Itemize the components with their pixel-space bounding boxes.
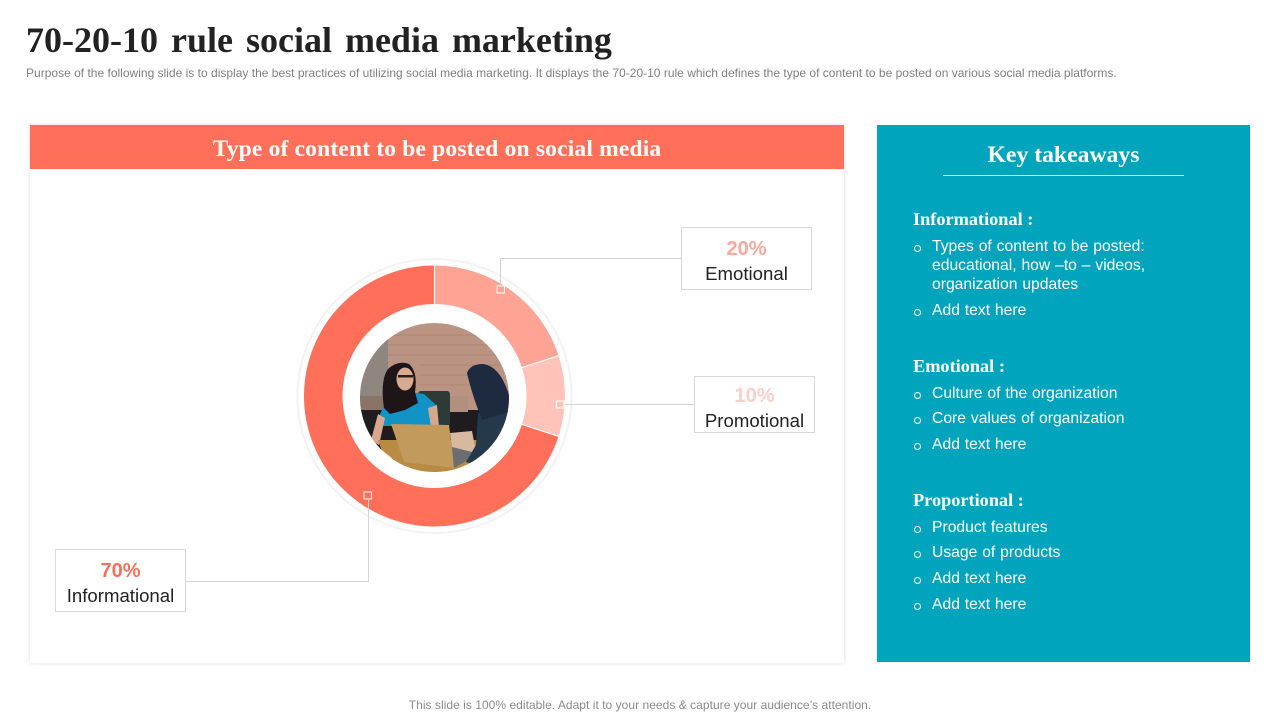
- informational bullet 1: [932, 238, 1145, 293]
- group: emotional: [913, 356, 1124, 453]
- emotional heading: Emotional :: [913, 356, 1005, 376]
- emotional value: 20%: [726, 238, 767, 260]
- connector: emotional: [497, 258, 682, 293]
- callout: emotional: [681, 227, 812, 290]
- segment: emotional 20%: [434, 266, 559, 368]
- title: 70-20-10 rule social media marketing: [26, 20, 612, 60]
- informational heading: Informational :: [913, 209, 1033, 229]
- proportional heading: Proportional :: [913, 490, 1024, 510]
- emotional label: Emotional: [705, 263, 788, 284]
- panel: content types: [30, 125, 844, 663]
- promotional value: 10%: [734, 385, 775, 407]
- group: proportional: [913, 490, 1060, 613]
- proportional bullet 2: Usage of products: [932, 544, 1060, 561]
- informational bullet 1: Types of content to be posted:: [932, 238, 1145, 255]
- panel: key takeaways: [877, 125, 1250, 662]
- callout: informational: [55, 549, 186, 612]
- outer ring: [298, 259, 572, 533]
- informational value: 70%: [100, 560, 141, 582]
- panel heading: [30, 125, 844, 169]
- footer note: This slide is 100% editable. Adapt it to your needs & capture your audience’s attention.: [409, 698, 871, 712]
- promotional label: Promotional: [705, 410, 804, 431]
- proportional bullet 3: Add text here: [932, 570, 1026, 587]
- group: informational: [913, 209, 1145, 319]
- proportional bullet 1: Product features: [932, 519, 1048, 536]
- informational bullet 1: educational, how –to – videos,: [932, 257, 1145, 274]
- connector: promotional: [556, 401, 694, 408]
- heading rule: [943, 175, 1184, 176]
- informational label: Informational: [67, 585, 174, 606]
- donut chart with connectors: [186, 258, 694, 582]
- proportional bullet 4: Add text here: [932, 596, 1026, 613]
- emotional bullet 2: Core values of organization: [932, 410, 1124, 427]
- segment dividers: [434, 265, 559, 436]
- callout: promotional: [694, 376, 815, 433]
- informational bullet 2: Add text here: [932, 302, 1026, 319]
- takeaways heading: Key takeaways: [988, 142, 1139, 168]
- connector: informational: [186, 492, 372, 582]
- informational bullet 1: organization updates: [932, 276, 1078, 293]
- segment: informational 70%: [304, 266, 559, 526]
- emotional bullet 3: Add text here: [932, 436, 1026, 453]
- panel heading: Type of content to be posted on social media: [213, 136, 661, 162]
- subtitle: Purpose of the following slide is to display the best practices of utilizing social media marketing. It displays the 70-20-10 rule which defines the type of content to be posted on various social media platforms.: [26, 66, 1117, 80]
- emotional bullet 1: Culture of the organization: [932, 385, 1118, 402]
- segment: promotional 10%: [522, 356, 565, 436]
- photo: meeting at a laptop: [358, 321, 511, 474]
